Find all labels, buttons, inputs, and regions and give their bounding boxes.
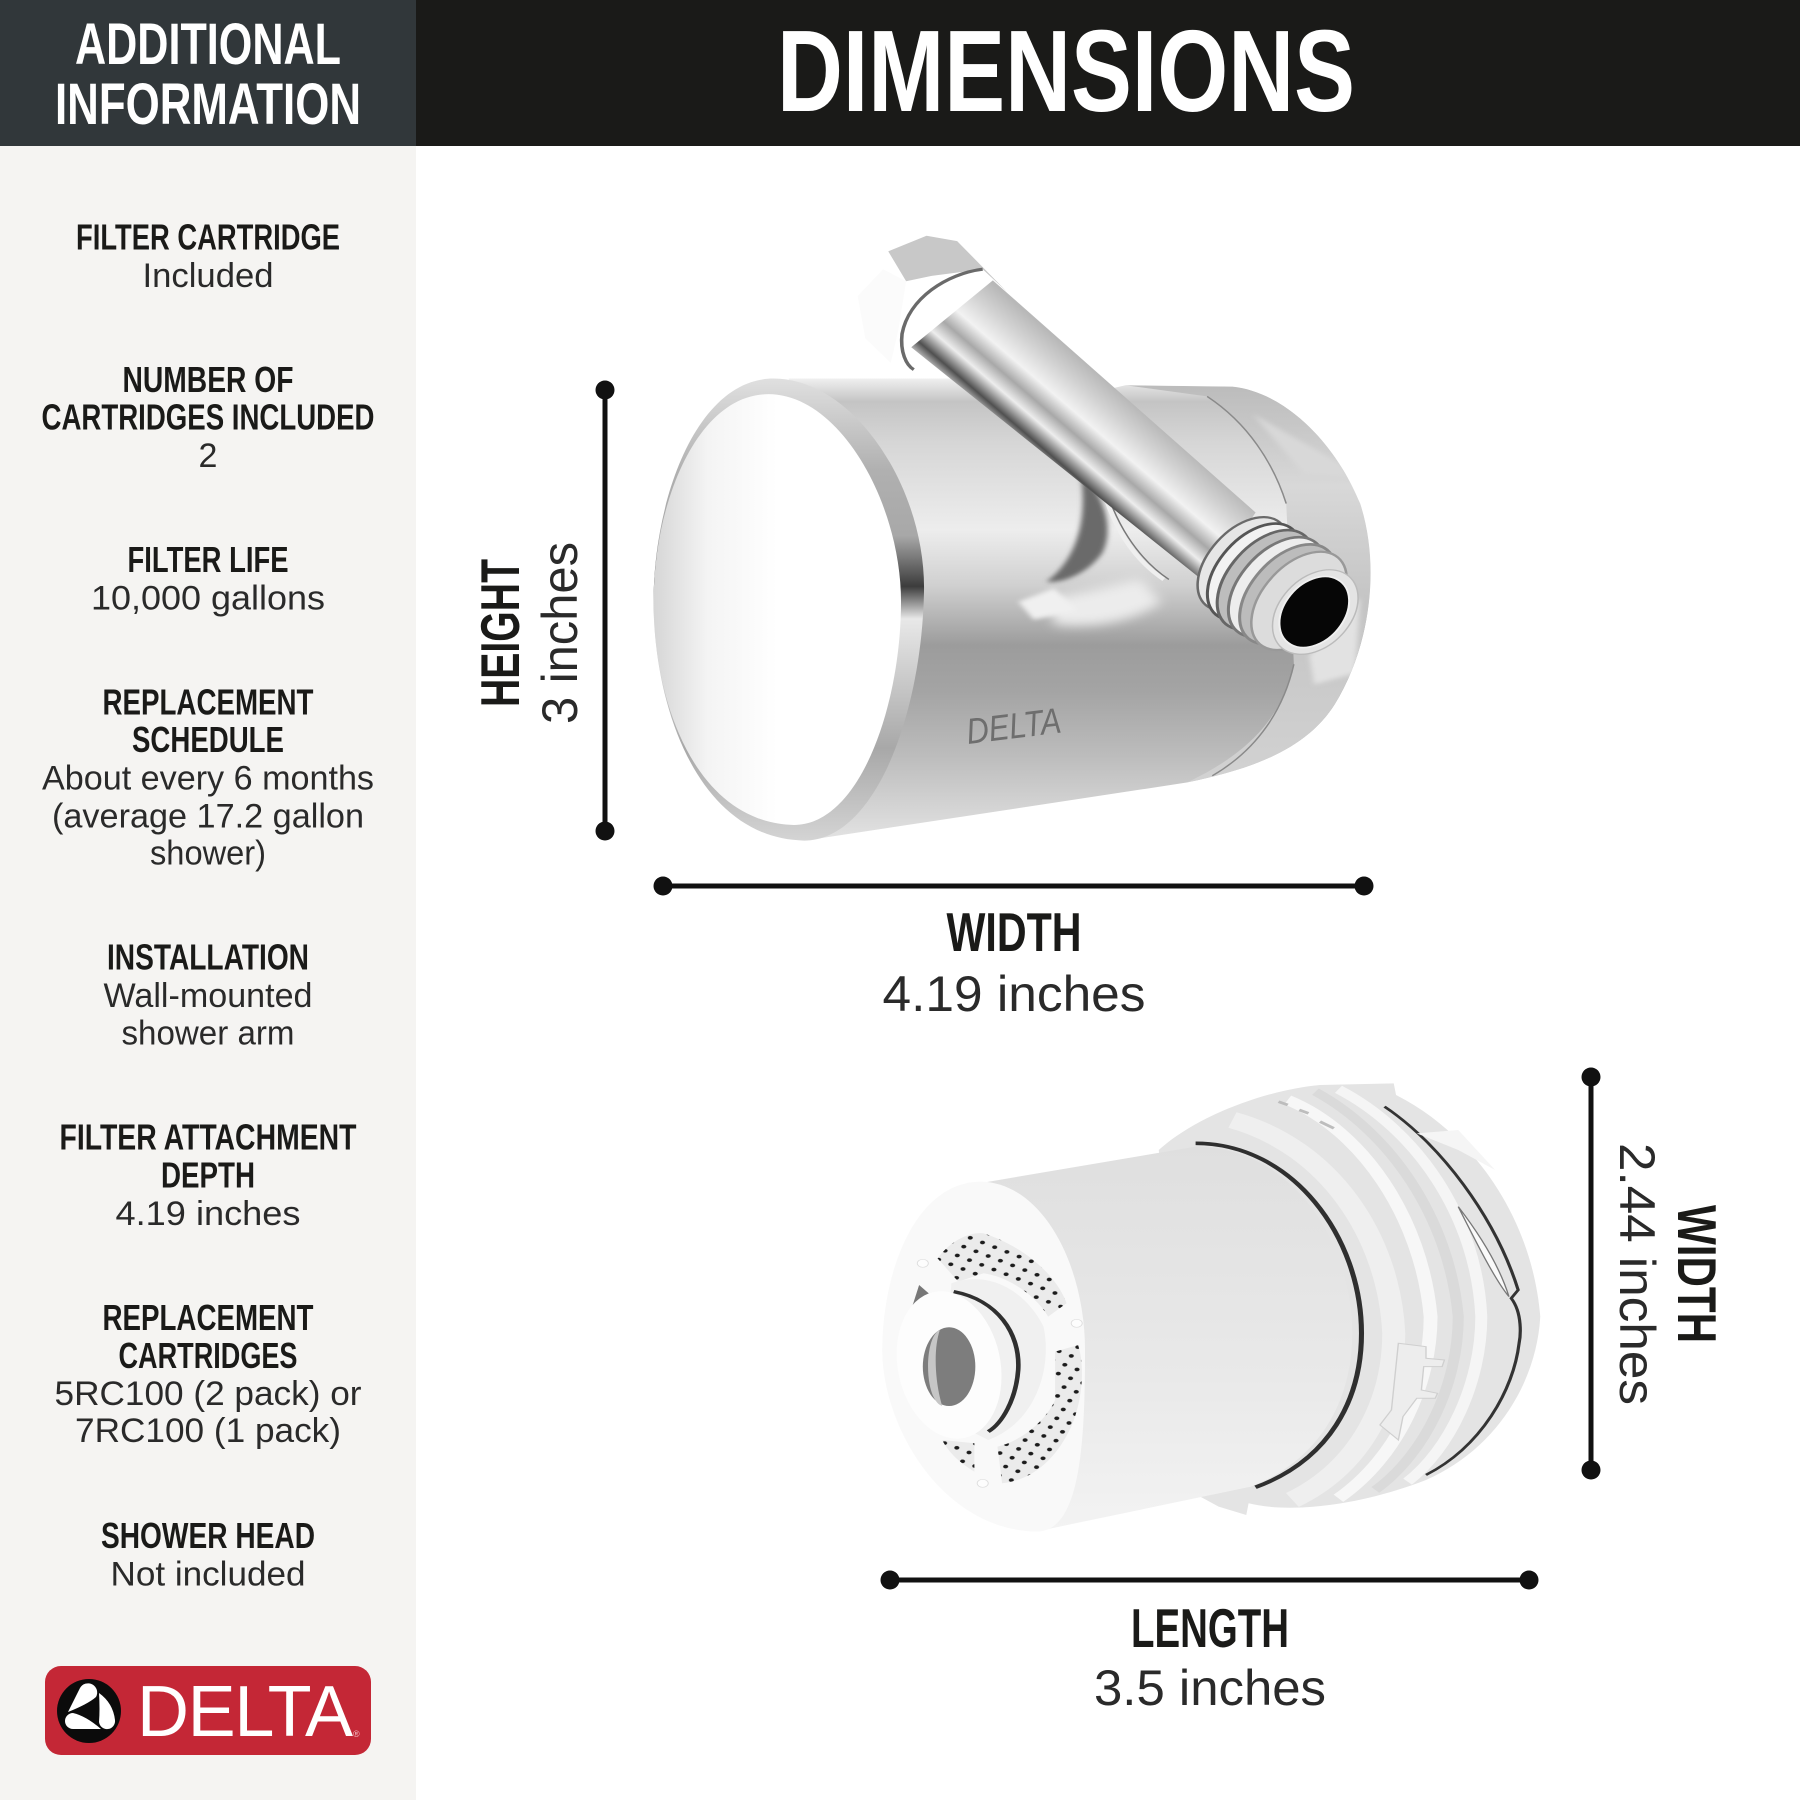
spec: replacement schedule: About every 6 months <box>42 760 374 798</box>
center hub <box>887 1279 1046 1442</box>
spec: number of cartridges included <box>42 359 374 475</box>
spec: replacement schedule: SCHEDULE <box>132 719 284 760</box>
spec: shower head <box>101 1515 315 1593</box>
spec: number of cartridges included: CARTRIDGES INCLUDED <box>42 397 374 438</box>
spec: installation: shower arm <box>122 1015 294 1053</box>
spec: filter life <box>91 539 325 618</box>
spec: filter attachment depth: DEPTH <box>161 1154 255 1196</box>
header: additional information <box>0 0 416 146</box>
spec: replacement cartridges: CARTRIDGES <box>118 1335 298 1376</box>
spec: filter attachment depth <box>60 1117 357 1233</box>
dimension: cartridge width: WIDTH <box>1666 1205 1728 1343</box>
product: chrome shower filter <box>654 236 1376 841</box>
spec: replacement schedule: shower) <box>150 834 266 872</box>
cartridge width line <box>1582 1068 1600 1480</box>
dimension: cartridge width: 2.44 inches <box>1609 1143 1665 1405</box>
logo: Delta <box>45 1666 371 1755</box>
spec: shower head: SHOWER HEAD <box>101 1515 315 1556</box>
header: dimensions <box>416 0 1800 146</box>
logo: Delta: ® <box>353 1729 360 1739</box>
spec: replacement schedule <box>42 682 374 872</box>
spec: installation: INSTALLATION <box>107 936 309 977</box>
icon: Delta tri-drop mark <box>57 1679 121 1743</box>
dimension: cartridge length: 3.5 inches <box>1094 1660 1326 1716</box>
threaded outlet <box>1179 503 1376 668</box>
outlet opening <box>1265 565 1363 659</box>
dimension: cartridge length <box>880 1570 1538 1716</box>
perforated mesh windows <box>912 1233 1082 1483</box>
filter body <box>789 379 1371 838</box>
length line <box>880 1570 1538 1590</box>
header: additional information: INFORMATION <box>55 72 361 137</box>
dimension: filter width: 4.19 inches <box>882 966 1146 1022</box>
spec: number of cartridges included: 2 <box>199 437 217 475</box>
dimension: height: 3 inches <box>532 542 588 724</box>
spec: replacement cartridges: 5RC100 (2 pack) or <box>54 1375 362 1413</box>
spec: filter attachment depth: 4.19 inches <box>116 1195 300 1233</box>
spec: number of cartridges included: NUMBER OF <box>122 359 294 400</box>
shower arm <box>858 236 1256 584</box>
spec: replacement schedule: REPLACEMENT <box>102 682 314 723</box>
dimension: height <box>469 380 614 840</box>
spec: replacement cartridges: 7RC100 (1 pack) <box>75 1412 341 1450</box>
spec: shower head: Not included <box>110 1555 306 1593</box>
dimension: filter width: WIDTH <box>946 901 1082 963</box>
spec: replacement cartridges: REPLACEMENT <box>102 1297 314 1338</box>
spec: installation: Wall-mounted <box>104 977 312 1015</box>
spec: filter cartridge <box>76 216 340 295</box>
cartridge cylinder <box>979 1143 1361 1530</box>
spec: filter attachment depth: FILTER ATTACHMENT <box>60 1117 357 1158</box>
header: dimensions: DIMENSIONS <box>777 6 1355 136</box>
panel: additional information sidebar <box>0 0 416 1800</box>
spec: filter life: 10,000 gallons <box>91 580 325 618</box>
width line <box>654 876 1374 896</box>
spec: replacement cartridges <box>54 1297 362 1450</box>
height line <box>596 380 614 840</box>
cartridge front face <box>882 1182 1085 1532</box>
dimension: height: HEIGHT <box>469 559 531 707</box>
dimension: cartridge width <box>1582 1068 1728 1480</box>
spec: installation <box>104 936 312 1053</box>
side clip <box>1380 1343 1444 1440</box>
spec: filter cartridge: Included <box>142 257 274 295</box>
dimension: cartridge length: LENGTH <box>1131 1597 1289 1659</box>
dimension: filter width <box>654 876 1374 1022</box>
product mark: DELTA on filter: DELTA <box>964 700 1063 752</box>
spec: filter life: FILTER LIFE <box>128 539 288 580</box>
spec: filter cartridge: FILTER CARTRIDGE <box>76 216 340 258</box>
logo: Delta: DELTA <box>137 1672 353 1752</box>
hex nut <box>858 236 1007 370</box>
hub opening <box>923 1327 975 1406</box>
spec: replacement schedule: (average 17.2 gallon <box>52 798 364 836</box>
header: additional information: ADDITIONAL <box>75 12 341 77</box>
collar and rings <box>1159 1083 1540 1515</box>
product: white filter cartridge <box>882 1083 1540 1532</box>
front cap <box>654 379 924 841</box>
